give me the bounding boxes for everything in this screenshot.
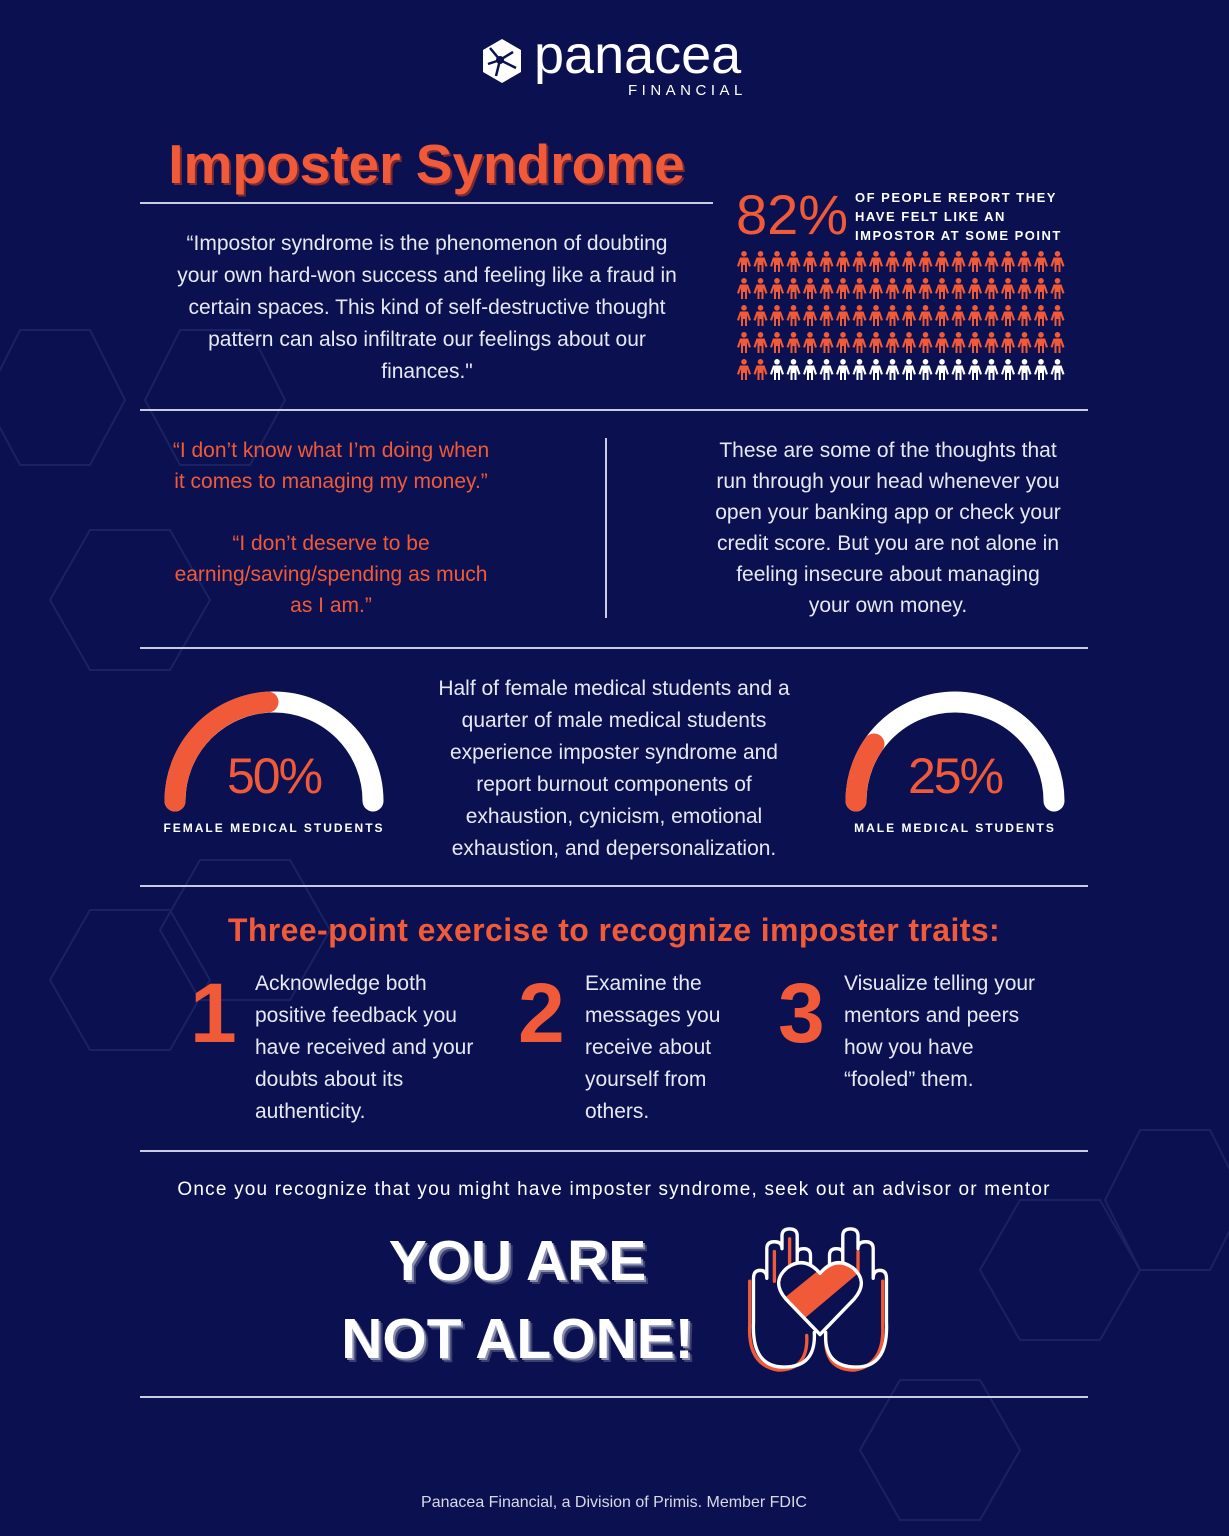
gauge: male: 25% <box>908 748 1002 804</box>
step 1: Acknowledge both positive feedback you have received and your doubts about its authenticity. <box>255 972 473 1123</box>
stat 82%: 82% <box>736 183 848 246</box>
logo: panacea <box>534 25 741 85</box>
step 3: 3 <box>778 966 825 1060</box>
orange quotes: “I don’t deserve to be earning/saving/spending as much as I am.” <box>175 532 487 617</box>
orange quotes: “I don’t know what I’m doing when it comes to managing my money.” <box>173 439 489 493</box>
gauge: male <box>846 692 1064 835</box>
thoughts text: These are some of the thoughts that run through your head whenever you open your banking app or check your credit score. But you are not alone in feeling insecure about managing your own money. <box>715 439 1061 617</box>
logo <box>483 25 747 99</box>
step 2: Examine the messages you receive about yourself from others. <box>585 972 720 1123</box>
stat 82%: OF PEOPLE REPORT THEY <box>855 190 1057 205</box>
people grid <box>737 251 1064 380</box>
stat 82%: HAVE FELT LIKE AN <box>855 209 1006 224</box>
step 2: 2 <box>518 966 565 1060</box>
gauge: female: 50% <box>227 748 321 804</box>
step 3: Visualize telling your mentors and peers how you have “fooled” them. <box>844 972 1035 1091</box>
advice line: Once you recognize that you might have imposter syndrome, seek out an advisor or mentor <box>177 1179 1051 1200</box>
gauge: female <box>163 692 385 835</box>
icon: logo mark <box>483 39 521 83</box>
icon: hands with heart <box>748 1227 888 1372</box>
step 1: 1 <box>190 966 237 1060</box>
step 2 <box>518 966 720 1123</box>
logo: FINANCIAL <box>628 82 747 99</box>
gauge: male: MALE MEDICAL STUDENTS <box>854 821 1056 835</box>
footer: Panacea Financial, a Division of Primis. Member FDIC <box>421 1494 807 1511</box>
orange quotes <box>173 439 489 617</box>
intro quote: “Impostor syndrome is the phenomenon of doubting your own hard-won success and feeling like a fraud in certain spaces. This kind of self-destructive thought pattern can also infiltrate our feelings about our finances." <box>177 232 677 383</box>
title: Imposter Syndrome <box>168 133 685 195</box>
exercise heading: Three-point exercise to recognize imposter traits: <box>228 912 1000 948</box>
stat 82% <box>736 183 1064 380</box>
you are not alone: NOT ALONE! <box>341 1307 694 1371</box>
you are not alone <box>341 1229 694 1371</box>
you are not alone: YOU ARE <box>389 1229 646 1293</box>
stat 82%: IMPOSTOR AT SOME POINT <box>855 228 1062 243</box>
gauge: female: FEMALE MEDICAL STUDENTS <box>163 821 385 835</box>
burnout text: Half of female medical students and a quarter of male medical students experience imposter syndrome and report burnout components of exhaustion, cynicism, emotional exhaustion, and depersonalization. <box>438 677 790 860</box>
